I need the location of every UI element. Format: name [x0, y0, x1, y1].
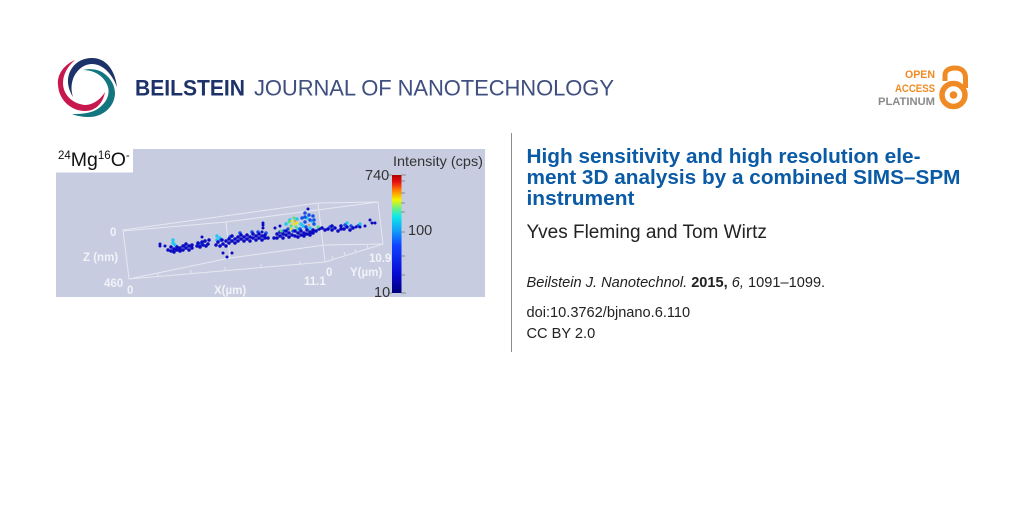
article title: instrument — [526, 188, 635, 210]
z axis labels: 0 — [110, 227, 116, 239]
ion label text: Mg — [71, 149, 98, 171]
colour bar labels: 740 — [365, 168, 389, 184]
scatter: ion intensity points — [160, 209, 375, 257]
isolated dark points — [160, 209, 375, 257]
y axis labels: 0 — [326, 267, 332, 279]
ion label text: 24 — [58, 150, 71, 162]
article title: ment 3D analysis by a combined SIMS–SPM — [526, 167, 960, 189]
journal name: bold part: BEILSTEIN — [135, 76, 245, 100]
authors: Yves Fleming and Tom Wirtz — [526, 222, 767, 243]
colour bar labels: 100 — [408, 223, 432, 239]
yellow points — [291, 221, 297, 229]
x axis labels: 11.1 — [304, 276, 326, 288]
intensity colour bar — [365, 153, 483, 301]
logo arc: crimson — [58, 60, 105, 111]
cyan points — [173, 218, 360, 245]
image background — [56, 149, 485, 297]
graphical abstract: 3D SIMS image — [56, 149, 485, 301]
y axis labels: Y(µm) — [350, 267, 382, 279]
3D wireframe box — [123, 202, 383, 279]
y axis labels: 10.9 — [369, 253, 391, 265]
journal name: regular part: JOURNAL OF NANOTECHNOLOGY — [254, 76, 614, 100]
doi: doi:10.3762/bjnano.6.110 — [526, 305, 690, 321]
article title: High sensitivity and high resolution ele- — [526, 146, 920, 168]
citation: Beilstein J. Nanotechnol. 2015, 6, 1091–1099. — [526, 275, 825, 291]
mid blue points — [184, 213, 358, 246]
vertical divider — [511, 133, 512, 352]
logo arc: teal — [72, 69, 115, 117]
z axis labels: Z (nm) — [83, 252, 118, 264]
ion label text: O — [111, 149, 126, 171]
colour bar title: Intensity (cps) — [393, 153, 483, 169]
badge text: open: OPEN — [905, 69, 935, 81]
colour bar labels: 10 — [374, 285, 390, 301]
green points — [281, 218, 318, 231]
journal logo: swirl rings — [58, 58, 117, 117]
dark blue points — [168, 226, 353, 252]
ion label box — [56, 149, 133, 172]
logo arc: navy — [68, 58, 117, 97]
axis labels — [83, 227, 391, 297]
icon: open padlock — [942, 68, 966, 106]
x axis labels — [127, 276, 326, 297]
journal name — [135, 76, 614, 100]
z axis labels — [83, 227, 123, 290]
licence: CC BY 2.0 — [526, 326, 595, 342]
ion label text: 16 — [98, 150, 111, 162]
x axis labels: 0 — [127, 285, 133, 297]
ion label text: - — [126, 150, 130, 162]
badge text: access: ACCESS — [895, 83, 935, 95]
x axis labels: X(µm) — [214, 285, 246, 297]
colour bar labels — [365, 168, 432, 301]
z axis labels: 460 — [104, 278, 123, 290]
badge text: platinum: PLATINUM — [878, 96, 935, 108]
y axis labels — [326, 253, 391, 279]
colour bar ticks — [388, 175, 406, 293]
orange points — [295, 221, 309, 225]
colour bar gradient — [392, 175, 402, 293]
article title — [526, 146, 960, 210]
open access platinum badge — [878, 68, 966, 108]
